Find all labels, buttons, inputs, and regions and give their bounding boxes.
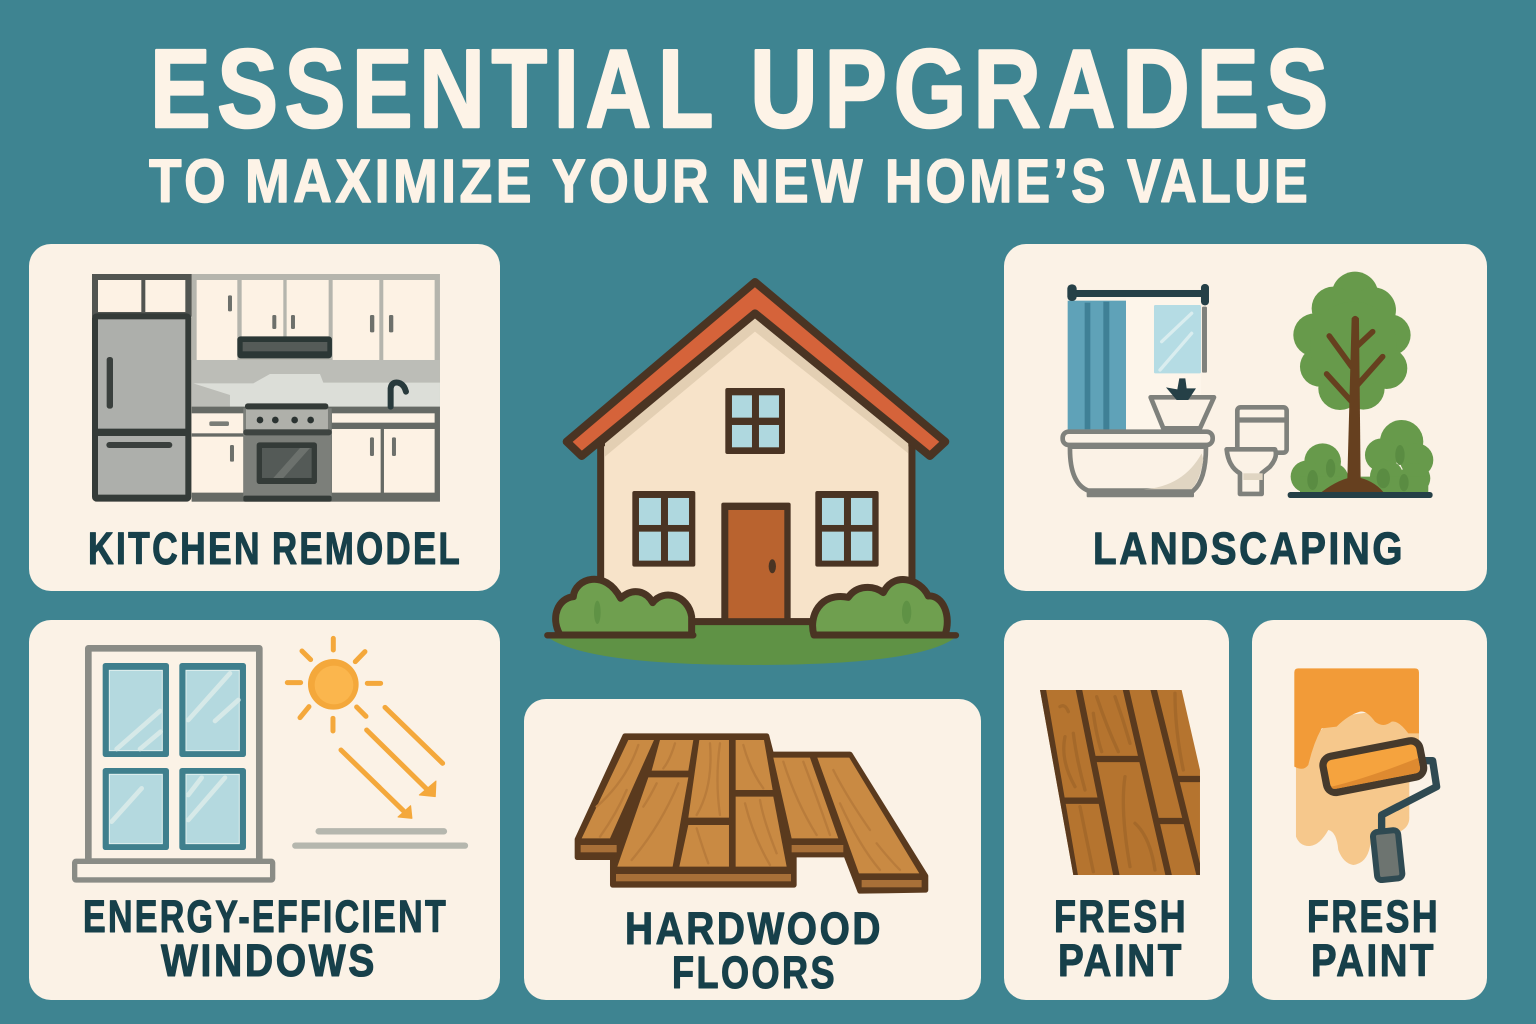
- label: paint: PAINT: [1058, 935, 1184, 986]
- subtitle: HOME’S: [885, 147, 1109, 215]
- roof shadow: [605, 318, 908, 457]
- panel: energy-efficient windows: [29, 620, 500, 1000]
- panel: hardwood floors: [524, 699, 981, 1000]
- icon: paint roller: [1294, 668, 1437, 881]
- icon: window: [75, 648, 273, 880]
- label: fresh: FRESH: [1307, 891, 1440, 942]
- label: paint: PAINT: [1311, 935, 1436, 986]
- paint card background: [1252, 620, 1487, 1000]
- attic window: [725, 388, 785, 454]
- doorstep line: [692, 618, 813, 625]
- subtitle: MAXIMIZE: [245, 147, 535, 215]
- windows card background: [29, 620, 500, 1000]
- label: fresh: FRESH: [1054, 891, 1188, 942]
- subtitle: [149, 147, 1311, 215]
- ground outline: [547, 626, 956, 645]
- icon: sun with rays: [287, 638, 465, 846]
- label: kitchen remodel: KITCHEN: [88, 523, 262, 574]
- label: windows: WINDOWS: [161, 935, 377, 986]
- ground: [545, 623, 958, 665]
- label: kitchen remodel: [88, 523, 462, 574]
- panel: landscaping: [1004, 244, 1487, 591]
- icon: wood floor tile: [1040, 688, 1202, 877]
- label: floors: FLOORS: [672, 947, 837, 998]
- central house illustration: [545, 282, 958, 665]
- subtitle: VALUE: [1127, 147, 1311, 215]
- icon: wood planks: [577, 736, 926, 891]
- title: ESSENTIAL: [150, 27, 720, 151]
- title: [150, 27, 1335, 151]
- label: landscaping: LANDSCAPING: [1093, 523, 1405, 574]
- left bush: [556, 579, 692, 635]
- kitchen card background: [29, 244, 500, 591]
- subtitle: TO: [149, 147, 229, 215]
- subtitle: YOUR: [552, 147, 712, 215]
- label: energy-efficient: ENERGY-EFFICIENT: [83, 891, 448, 942]
- house walls: [601, 315, 912, 622]
- panel: kitchen remodel: [29, 244, 500, 591]
- landscaping card background: [1004, 244, 1487, 591]
- panel: fresh paint (wood): [1004, 620, 1229, 1000]
- title: UPGRADES: [750, 27, 1335, 151]
- icon: kitchen: [92, 274, 440, 502]
- left window: [632, 491, 695, 567]
- bush leaf accents: [594, 601, 911, 624]
- hardwood card background: [524, 699, 981, 1000]
- door: [721, 503, 791, 623]
- panel: fresh paint (roller): [1252, 620, 1487, 1000]
- label: kitchen remodel: REMODEL: [272, 523, 462, 574]
- label: hardwood: HARDWOOD: [625, 903, 883, 954]
- roof: [567, 282, 945, 456]
- right window: [815, 491, 879, 567]
- icon: bathroom and tree: [1063, 272, 1433, 498]
- wood card background: [1004, 620, 1229, 1000]
- subtitle: NEW: [731, 147, 866, 215]
- right bush: [813, 580, 947, 635]
